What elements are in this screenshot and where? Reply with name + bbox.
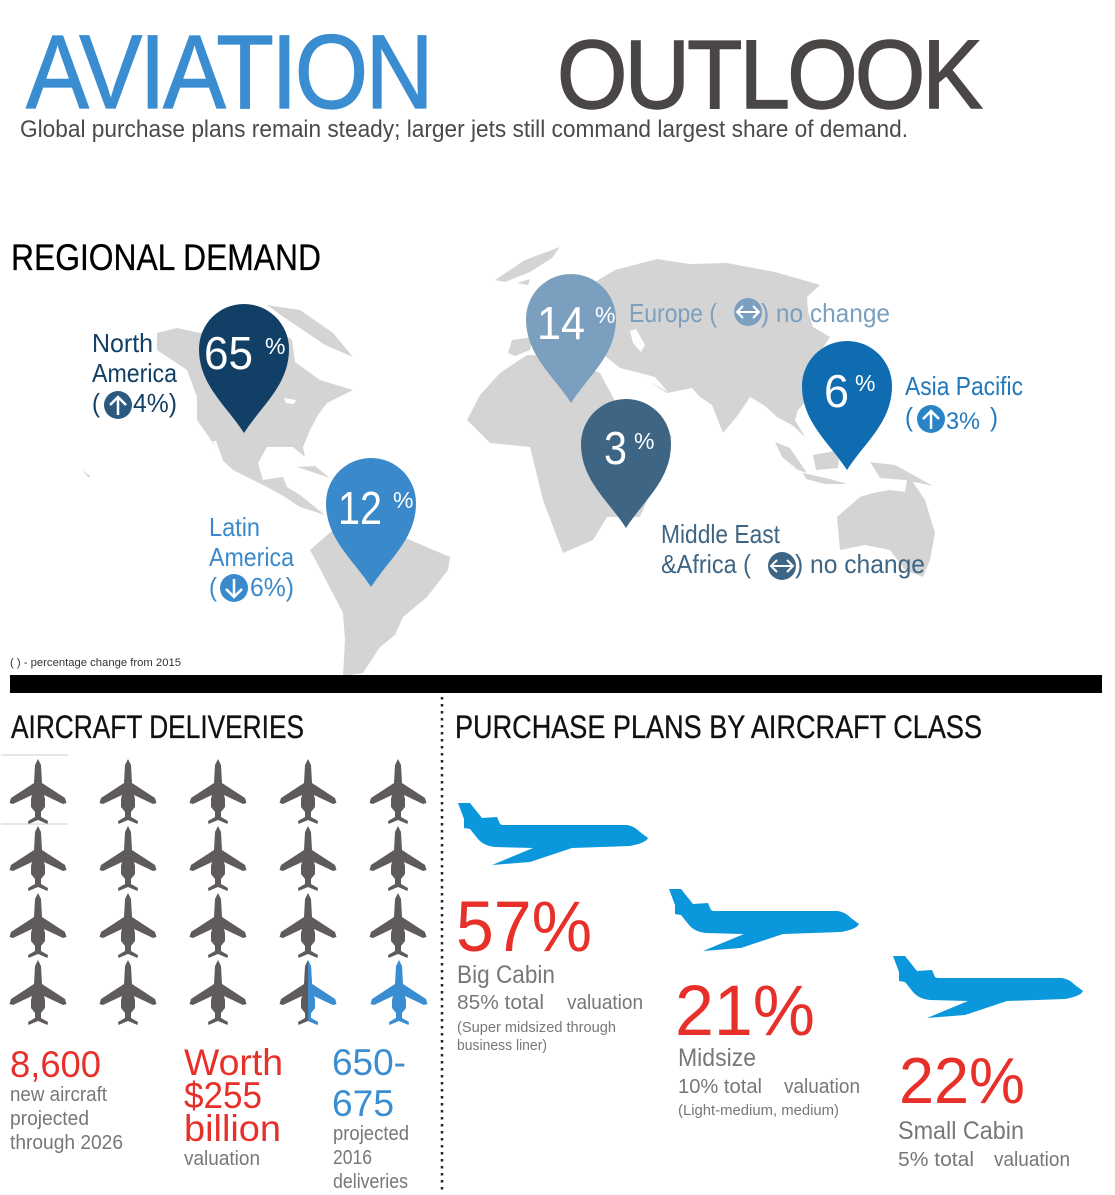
class: big cabin: valuation: [567, 992, 643, 1014]
class: small cabin: valuation: [994, 1149, 1070, 1171]
pin: Latin America: %: [393, 487, 413, 513]
pin: Latin America: 12: [338, 482, 382, 534]
label: North America: [92, 328, 177, 419]
South America: [310, 520, 450, 676]
label: Asia Pacific: Asia Pacific: [905, 371, 1023, 401]
label: Middle East and Africa: ) no change: [795, 549, 925, 579]
title: [26, 14, 982, 131]
Africa: [467, 355, 672, 553]
world map: [82, 247, 935, 676]
pin: Europe: %: [595, 302, 615, 328]
stat: valuation: Worth: [184, 1042, 283, 1083]
stat: valuation: valuation: [184, 1148, 260, 1170]
class: big cabin: Big Cabin: [457, 961, 555, 989]
label: Europe: [629, 298, 890, 328]
class: midsize: [675, 972, 860, 1119]
stat: projected deliveries: 675: [332, 1083, 394, 1124]
label: Asia Pacific: (: [905, 402, 913, 432]
stat: new aircraft: [10, 1044, 123, 1154]
class: midsize: 10% total: [678, 1076, 762, 1098]
class: big cabin: business liner): [457, 1037, 547, 1054]
label: Asia Pacific: [905, 371, 1023, 435]
label: Latin America: America: [209, 542, 294, 572]
pin: Asia Pacific: [802, 341, 892, 470]
label: North America: 4%): [133, 388, 177, 418]
label: Asia Pacific: 3%: [946, 408, 980, 435]
label: Latin America: Latin: [209, 512, 260, 542]
stat: valuation: billion: [184, 1108, 281, 1149]
stat: new aircraft: projected: [10, 1108, 89, 1130]
Sumatra: [775, 442, 807, 473]
aircraft icon grid: [10, 759, 428, 1025]
pin: North America: %: [265, 333, 285, 359]
stat: projected deliveries: [332, 1042, 409, 1193]
label: Latin America: (: [209, 572, 217, 602]
Caribbean: [297, 466, 330, 478]
heading: regional demand: REGIONAL DEMAND: [11, 237, 321, 278]
Borneo: [813, 450, 840, 470]
Spain: [508, 337, 533, 356]
stat: valuation: [184, 1042, 283, 1170]
label: Middle East and Africa: [661, 519, 925, 580]
icon: small cabin plane: [893, 956, 1083, 1018]
class: small cabin: Small Cabin: [898, 1117, 1024, 1145]
icon: midsize plane: [669, 889, 859, 951]
pin: Middle East and Africa: %: [634, 428, 654, 454]
icon: big cabin plane: [458, 803, 648, 865]
Hawaii: [82, 470, 90, 478]
Eurasia: [533, 259, 830, 437]
label: Asia Pacific: ): [990, 402, 998, 432]
stat: projected deliveries: 650-: [332, 1042, 406, 1083]
stat: projected deliveries: 2016: [333, 1147, 372, 1169]
label: Latin America: [209, 512, 294, 602]
pin: North America: [199, 304, 289, 433]
New Guinea: [870, 462, 933, 486]
label: Middle East and Africa: Middle East: [661, 519, 781, 549]
heading: purchase plans: PURCHASE PLANS BY AIRCRAFT CLASS: [455, 709, 982, 745]
pin: Europe: [526, 274, 616, 403]
label: North America: (: [92, 388, 100, 418]
Australia: [837, 475, 935, 577]
pin: Europe: 14: [537, 297, 585, 349]
class: midsize: valuation: [784, 1076, 860, 1098]
heading: aircraft deliveries: AIRCRAFT DELIVERIES: [11, 709, 304, 745]
North America: [157, 315, 353, 515]
class: midsize: (Light-medium, medium): [678, 1102, 839, 1119]
label: North America: North: [92, 328, 153, 358]
class: midsize: Midsize: [678, 1044, 756, 1072]
pin: Asia Pacific: %: [855, 370, 875, 396]
pin: Middle East and Africa: [581, 399, 671, 528]
title: AVIATION: [26, 14, 431, 131]
label: Latin America: 6%): [250, 572, 294, 602]
class: small cabin: 5% total: [898, 1149, 974, 1171]
inland seas: [213, 329, 668, 466]
class: small cabin: [898, 1044, 1070, 1171]
stat: projected deliveries: deliveries: [333, 1171, 408, 1193]
section divider bar: [10, 675, 1102, 693]
class: big cabin: 57%: [456, 888, 592, 967]
class: big cabin: (Super midsized through: [457, 1019, 616, 1036]
stat: new aircraft: new aircraft: [10, 1084, 107, 1106]
pin: Latin America: [326, 458, 416, 587]
subtitle: Global purchase plans remain steady; larger jets still command largest share of demand.: [20, 116, 908, 143]
stat: new aircraft: 8,600: [10, 1044, 101, 1085]
Greenland north Atlantic: [495, 247, 560, 282]
title: OUTLOOK: [557, 20, 982, 129]
class: midsize: 21%: [675, 972, 815, 1051]
class: small cabin: 22%: [899, 1044, 1025, 1117]
pin: North America: 65: [204, 327, 253, 379]
class: big cabin: 85% total: [457, 992, 544, 1014]
Arctic islands and Greenland: [267, 305, 353, 357]
Java: [803, 473, 847, 484]
stat: projected deliveries: projected: [333, 1123, 409, 1145]
label: North America: America: [92, 358, 177, 388]
stat: valuation: $255: [184, 1075, 262, 1116]
class: big cabin: [456, 888, 643, 1054]
label: Europe: Europe (: [629, 298, 717, 328]
stat: new aircraft: through 2026: [10, 1132, 123, 1154]
pin: Asia Pacific: 6: [824, 365, 849, 417]
pin: Middle East and Africa: 3: [604, 422, 627, 474]
label: Middle East and Africa: &Africa (: [661, 549, 751, 579]
label: Europe: ) no change: [761, 298, 890, 328]
footnote: ( ) - percentage change from 2015: [10, 657, 181, 669]
